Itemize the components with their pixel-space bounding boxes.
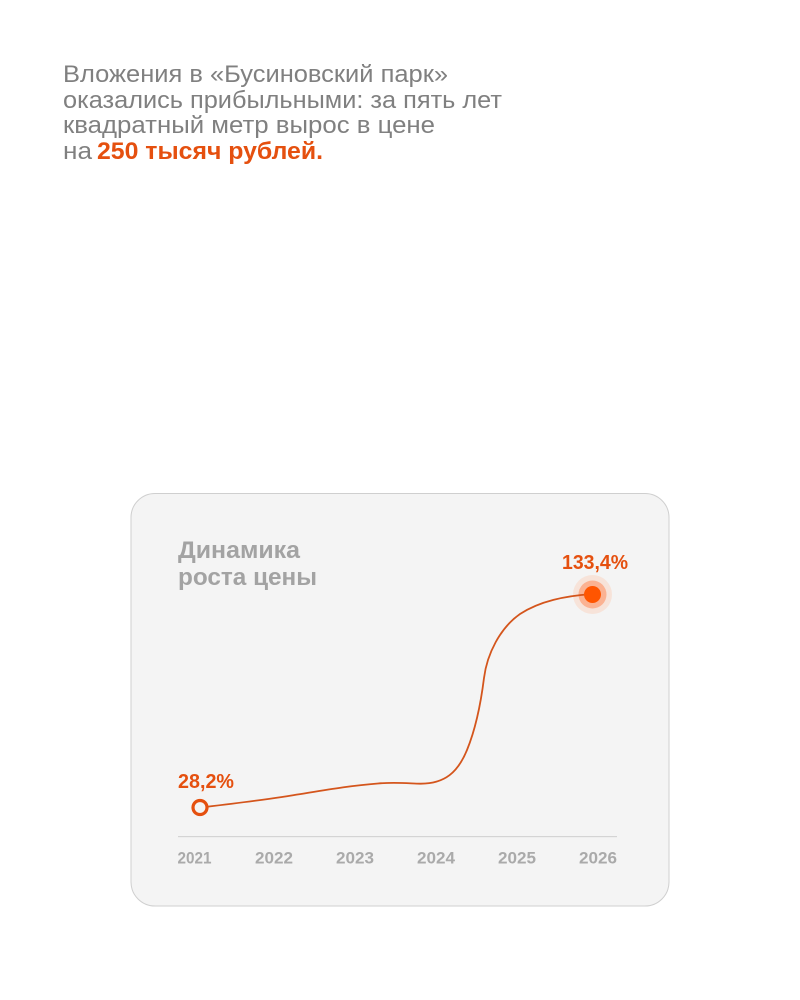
heading: intro text: Вложения в «Бусиновский парк»	[63, 61, 448, 88]
x axis year labels	[178, 850, 617, 868]
heading: intro text: оказались прибыльными: за пять лет	[63, 87, 502, 114]
value label: 133,4%: 133,4%	[562, 551, 628, 574]
x axis year labels: 2021	[178, 850, 212, 868]
marker: end point 2026	[584, 586, 601, 603]
marker halo: end point 2026	[573, 575, 612, 614]
heading: intro text: квадратный метр вырос в цене	[63, 112, 435, 139]
chart title	[178, 537, 317, 591]
chart title: Динамика	[178, 537, 301, 564]
x axis year labels: 2022	[255, 850, 293, 868]
chart title: роста цены	[178, 564, 317, 591]
x axis year labels: 2023	[336, 850, 374, 868]
heading: intro text	[63, 61, 502, 165]
x axis year labels: 2024	[417, 850, 456, 868]
value label: 28,2%: 28,2%	[178, 770, 234, 793]
panel: price dynamics chart	[131, 494, 669, 906]
x axis year labels: 2026	[579, 850, 617, 868]
x axis line	[178, 836, 617, 837]
panel background	[131, 494, 669, 906]
heading: intro text: 250 тысяч рублей.	[97, 138, 323, 165]
x axis year labels: 2025	[498, 850, 536, 868]
marker: start point 2021	[193, 800, 207, 814]
heading: intro text: на	[63, 138, 93, 165]
line chart: growth curve	[205, 594, 592, 807]
